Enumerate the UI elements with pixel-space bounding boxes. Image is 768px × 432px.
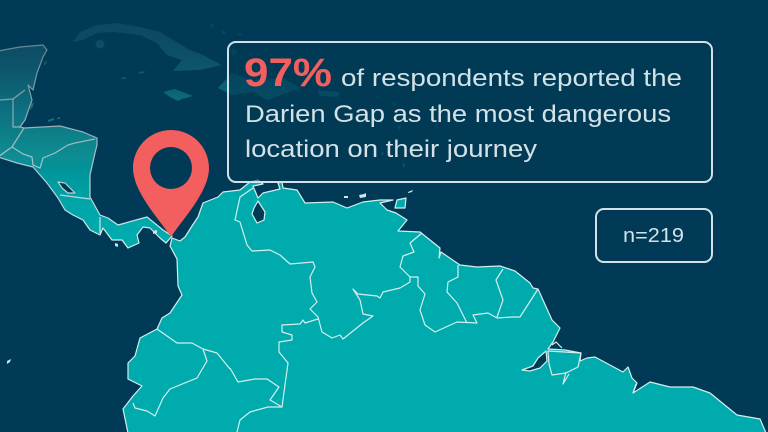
- small Panama islands: [115, 230, 157, 247]
- Amazon delta channels: [522, 351, 547, 371]
- Lake Maracaibo: [252, 201, 265, 223]
- Caribbean islands: [30, 22, 405, 168]
- northern offshore islands: [344, 190, 413, 198]
- map pin: [133, 130, 209, 237]
- Central America borders: [12, 139, 100, 233]
- Lake Nicaragua: [58, 182, 75, 193]
- delta inlet: [552, 342, 636, 393]
- Colombia-Ecuador and Ecuador-Peru borders: [133, 329, 230, 416]
- Trinidad: [395, 198, 406, 208]
- statement line 1: of respondents reported the: [341, 65, 682, 92]
- South America landmass: [123, 180, 766, 432]
- Colombia-Brazil border: [279, 319, 318, 407]
- callout box: [228, 42, 712, 182]
- Central America isthmus: [0, 126, 172, 248]
- Colombia-Venezuela border: [235, 188, 422, 339]
- statement line 3: location on their journey: [245, 136, 537, 163]
- statement line 2: Darien Gap as the most dangerous: [245, 101, 671, 128]
- Guyana-Suriname and Suriname-French Guiana borders: [447, 265, 503, 323]
- Guyana-Brazil border: [410, 277, 538, 332]
- Colombia-Peru and Peru-Brazil borders: [230, 368, 282, 432]
- Marajo island: [548, 351, 581, 375]
- Belize border: [0, 90, 25, 127]
- sample size box: n=219: [623, 225, 684, 247]
- Yucatan, Belize and Guatemala: [0, 45, 47, 157]
- sample size box: [596, 209, 712, 262]
- statistic: 97%: [244, 51, 332, 95]
